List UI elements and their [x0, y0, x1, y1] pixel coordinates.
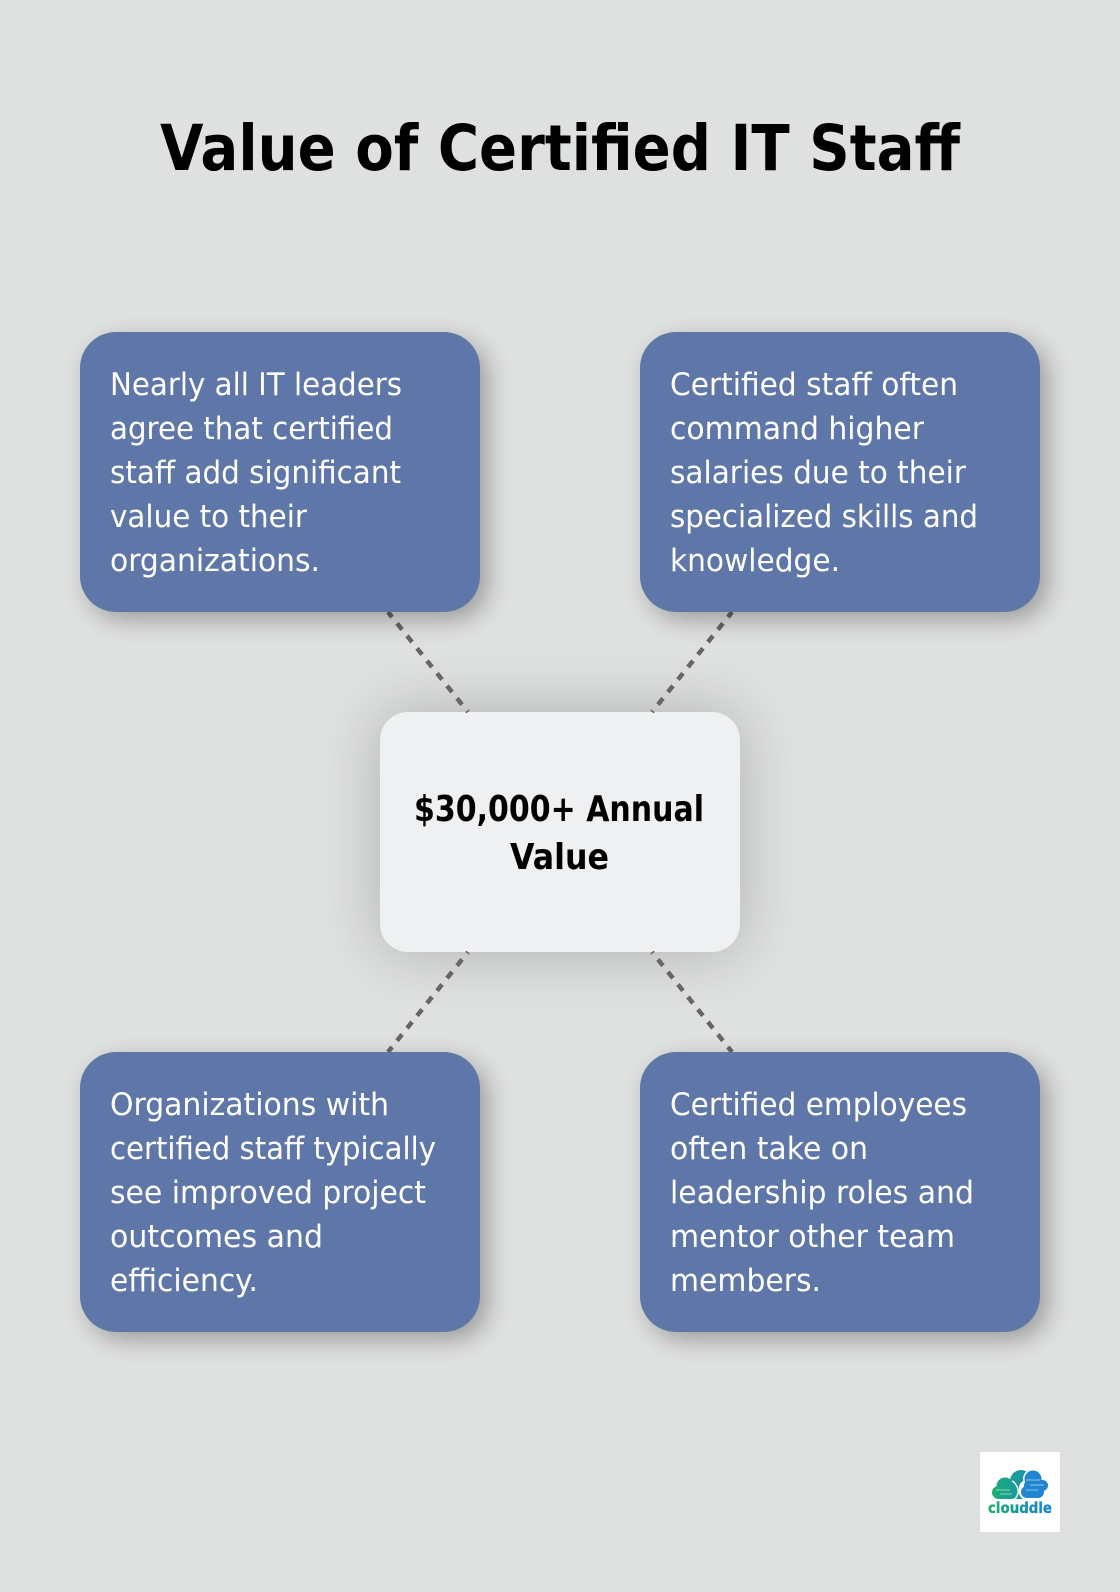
panel: IT leaders agree: agree that certified: [110, 411, 393, 447]
panel: leadership roles: leadership roles and: [670, 1175, 974, 1211]
panel: IT leaders agree: [80, 332, 480, 612]
panel: improved outcomes: [80, 1052, 480, 1332]
panel: IT leaders agree: staff add significant: [110, 455, 401, 491]
panel: central value: [380, 712, 740, 952]
panel: higher salaries: knowledge.: [670, 543, 840, 579]
panel: higher salaries: [640, 332, 1040, 612]
panel: leadership roles: [640, 1052, 1040, 1332]
panel: leadership roles: Certified employees: [670, 1087, 967, 1123]
panel: leadership roles: often take on: [670, 1131, 868, 1167]
panel: improved outcomes: see improved project: [110, 1175, 426, 1211]
panel: IT leaders agree: value to their: [110, 499, 307, 535]
panel: higher salaries: Certified staff often: [670, 367, 958, 403]
icon: clouddle logo: [980, 1452, 1060, 1532]
panel: IT leaders agree: Nearly all IT leaders: [110, 367, 402, 403]
panel: IT leaders agree: organizations.: [110, 543, 320, 579]
panel: improved outcomes: certified staff typically: [110, 1131, 436, 1167]
panel: central value: Value: [510, 837, 609, 878]
panel: higher salaries: salaries due to their: [670, 455, 966, 491]
panel: higher salaries: specialized skills and: [670, 499, 978, 535]
panel: improved outcomes: outcomes and: [110, 1219, 323, 1255]
panel: leadership roles: mentor other team: [670, 1219, 955, 1255]
icon: clouddle logo: clouddle: [988, 1499, 1052, 1517]
panel: higher salaries: command higher: [670, 411, 924, 447]
panel: leadership roles: members.: [670, 1263, 821, 1299]
panel: improved outcomes: efficiency.: [110, 1263, 258, 1299]
panel: improved outcomes: Organizations with: [110, 1087, 389, 1123]
